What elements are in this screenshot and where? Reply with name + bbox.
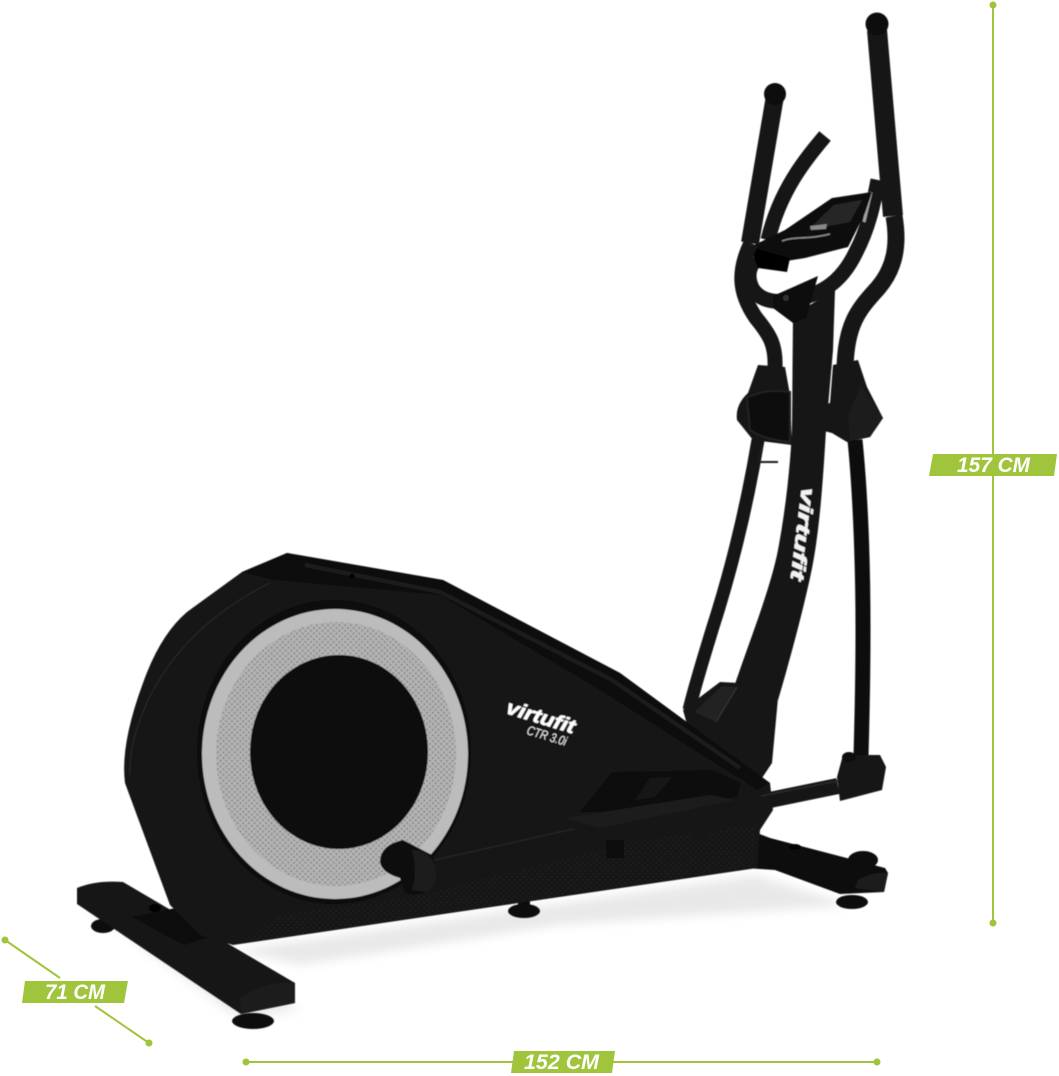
dimension: width 71 CM (2, 936, 152, 1046)
foot pedal (560, 767, 757, 835)
right base stabiliser (745, 833, 888, 909)
rear rail link and bracket (760, 752, 886, 802)
tower base shroud (683, 682, 778, 778)
dimension: width 71 CM: 71 CM (45, 981, 105, 1004)
right pivot hub (805, 360, 883, 442)
right moving handle (845, 12, 896, 368)
speaker grille strip (243, 825, 755, 942)
column lettering: virtufit (786, 486, 818, 582)
pedal mounts (606, 826, 709, 858)
brand logo on housing (504, 697, 579, 749)
inner handlebar (749, 180, 878, 301)
dimension: height 157 CM: 157 CM (957, 454, 1031, 477)
middle foot (508, 898, 540, 918)
near-side main rail (855, 440, 863, 756)
left moving handle (742, 83, 786, 368)
left pivot hub and bottle holder (737, 365, 792, 462)
flywheel disc (197, 600, 471, 904)
flywheel housing (124, 553, 773, 945)
dimension: height 157 CM (929, 2, 1057, 926)
tower column (735, 290, 835, 700)
dimension: length 152 CM: 152 CM (524, 1051, 600, 1074)
dimension: length 152 CM (242, 1051, 880, 1074)
front pedal arm (380, 823, 600, 895)
floor shadow (85, 875, 850, 1020)
far-side main rail (689, 440, 758, 710)
short middle tube (768, 136, 825, 240)
left base stabiliser (77, 882, 295, 1029)
console (750, 192, 872, 323)
brand logo on housing: CTR 3.0i (525, 723, 570, 749)
elliptical trainer (77, 12, 896, 1029)
brand logo on housing: virtufit (504, 697, 579, 739)
